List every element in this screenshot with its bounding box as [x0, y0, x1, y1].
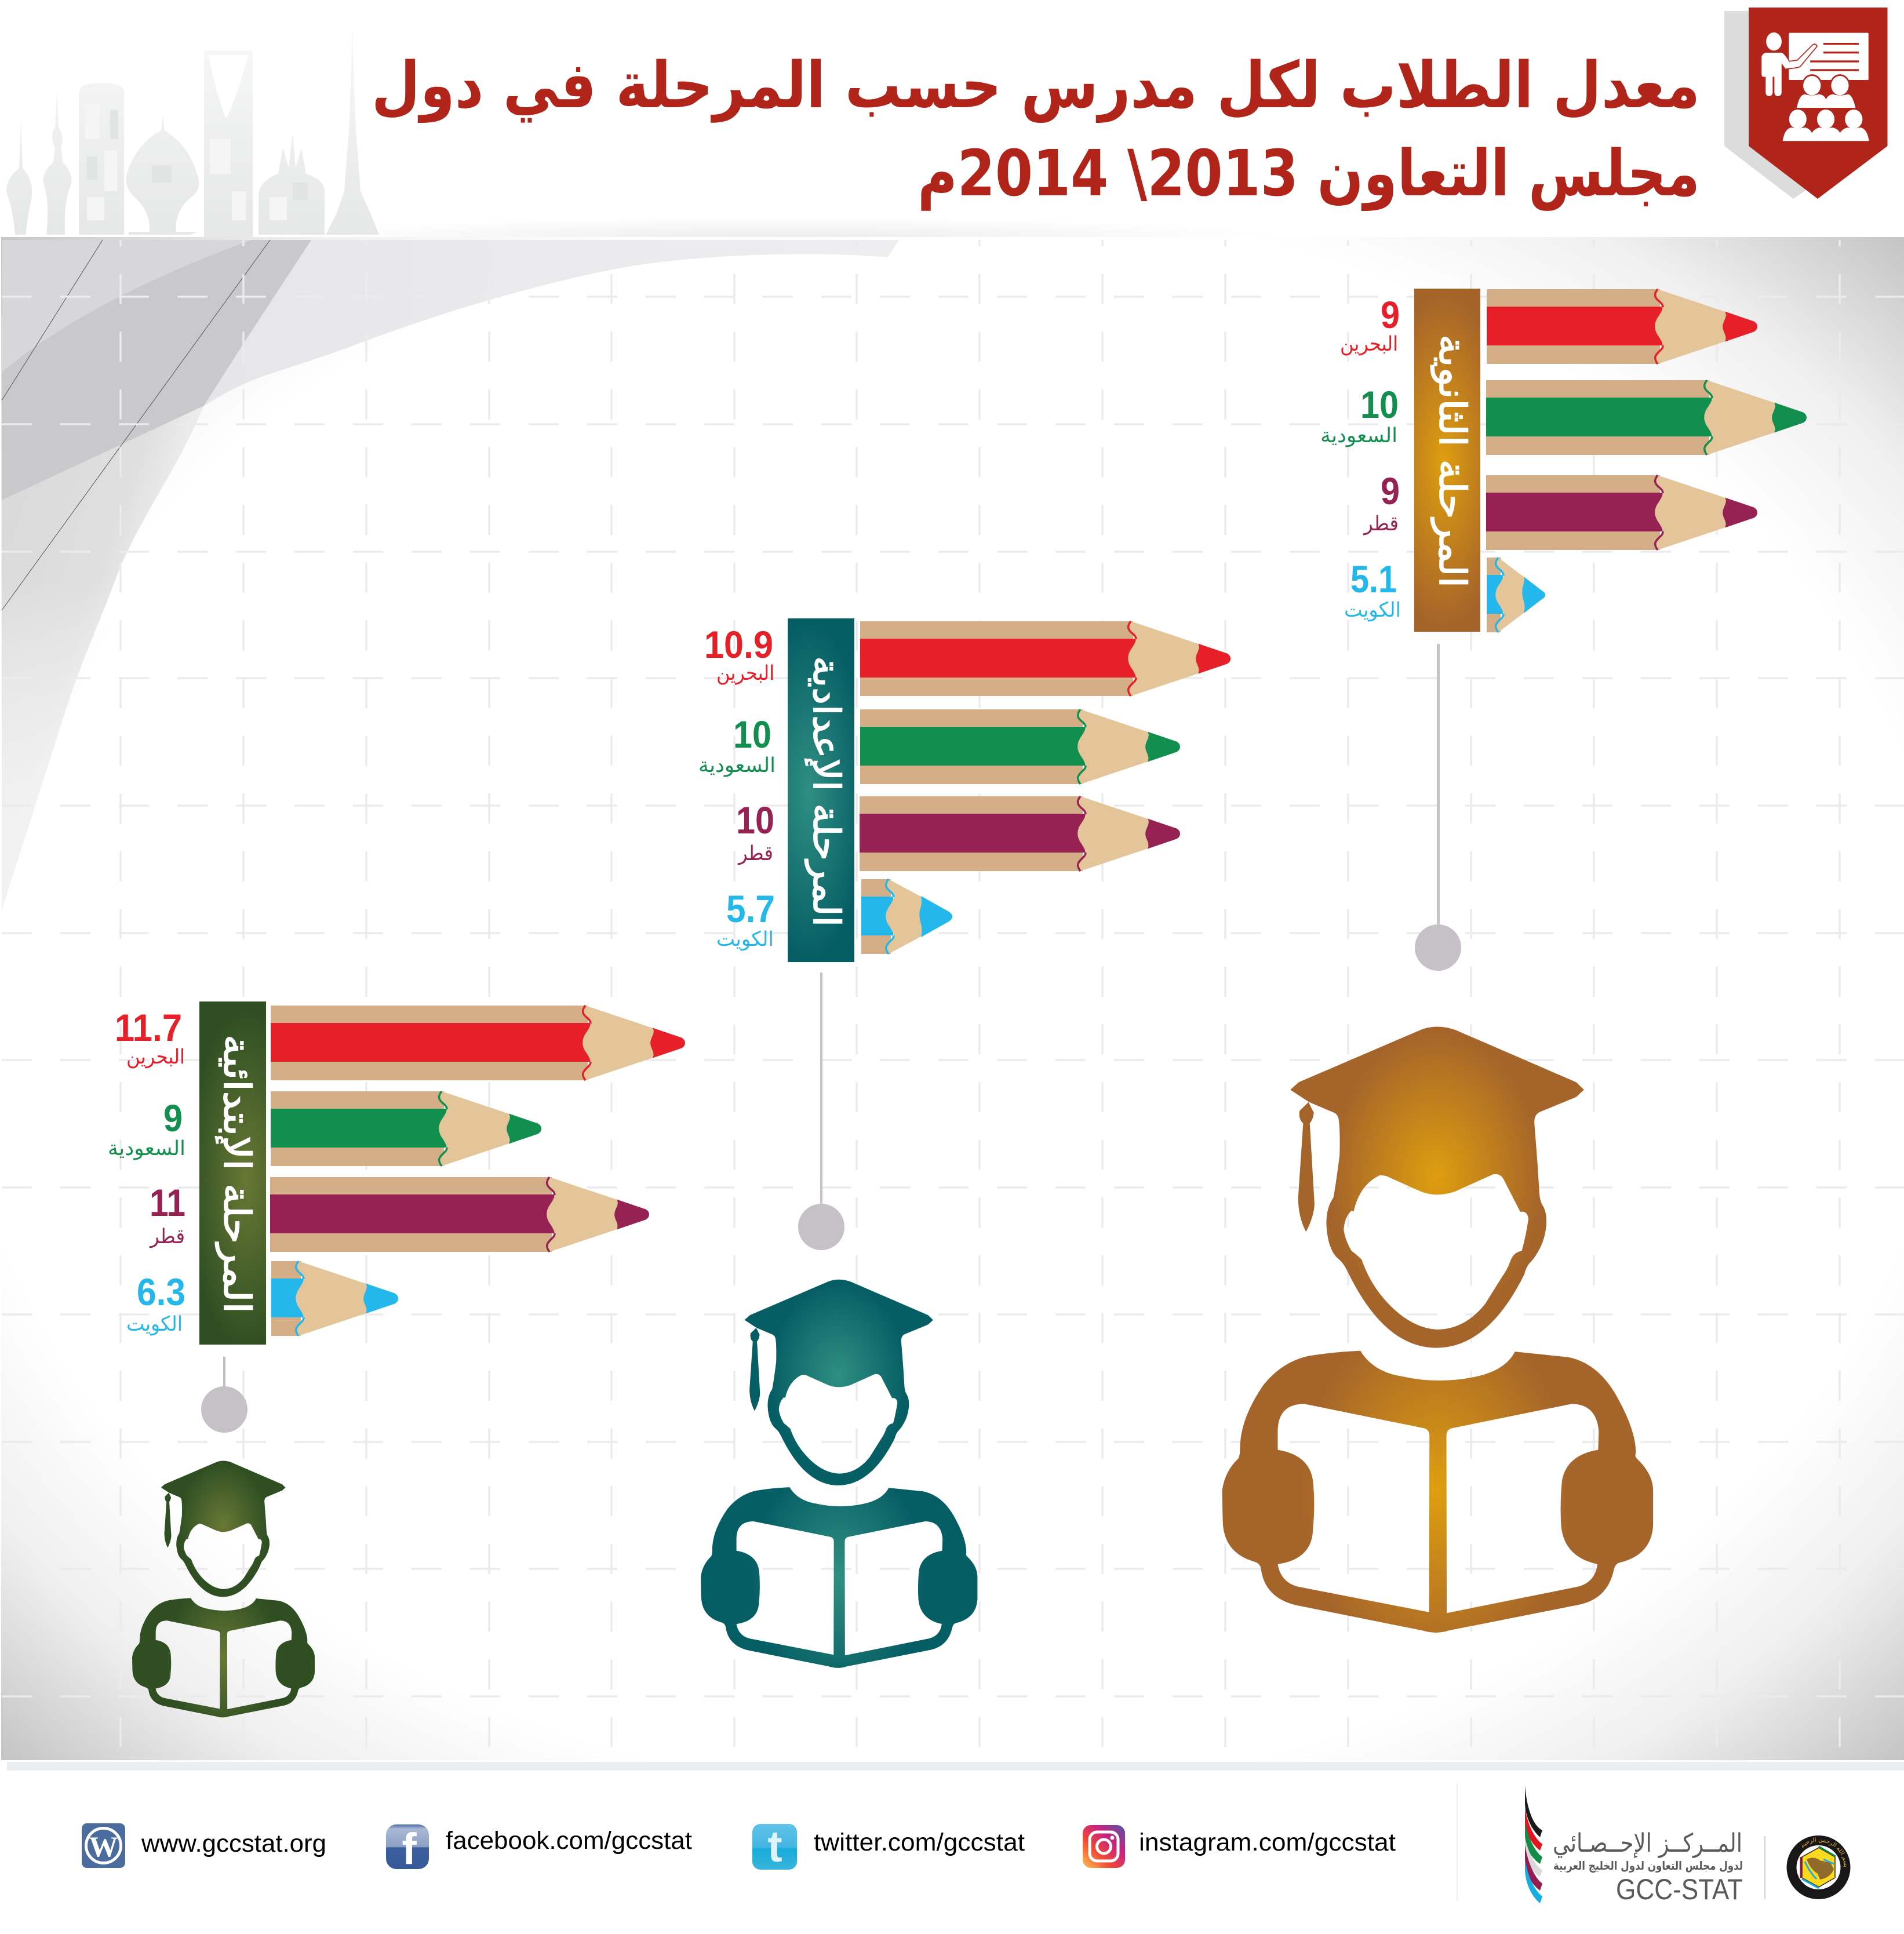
value labels: intermediate [698, 623, 776, 951]
value labels: secondary: 10 [1360, 383, 1399, 426]
logo: GCC emblem: بسم الله الرحمن الرحيم [1803, 1837, 1847, 1867]
value labels: intermediate: الكويت [716, 928, 774, 951]
value labels: intermediate: 10 [736, 799, 774, 842]
pencil: Kuwait 6.3 [271, 1261, 398, 1336]
logo: GCC-STAT: GCC-STAT [1616, 1873, 1743, 1906]
level banner: secondary [1414, 289, 1480, 632]
facebook link: f [402, 1824, 417, 1874]
value labels: secondary: قطر [1363, 512, 1399, 536]
connector: intermediate [798, 973, 844, 1250]
value labels: intermediate: قطر [737, 842, 773, 865]
icon: large student reading [1222, 1027, 1653, 1633]
logo divider [1764, 1836, 1765, 1899]
twitter link: t [767, 1822, 782, 1871]
icon: small student reading [132, 1460, 315, 1717]
facebook link [386, 1824, 692, 1874]
panel swoosh shapes [1, 216, 1904, 1762]
title [372, 48, 1700, 211]
background panel [1, 237, 1904, 1760]
pencil: Qatar 9 [1486, 475, 1757, 550]
logo ribbons [1525, 1785, 1542, 1903]
pencil: Kuwait 5.1 [1487, 558, 1545, 632]
pencil: Bahrain 11.7 [271, 1006, 685, 1080]
value labels: primary: البحرين [126, 1046, 185, 1069]
pencil: Qatar 11 [270, 1177, 649, 1252]
value labels: intermediate: 10.9 [704, 623, 773, 666]
logo: GCC-STAT [1525, 1785, 1743, 1906]
logo: GCC-STAT: المــركــز الإحــصـائي [1553, 1829, 1742, 1858]
twitter link [752, 1822, 1025, 1871]
value labels: primary: 9 [163, 1097, 183, 1139]
facebook link: facebook.com/gccstat [446, 1827, 692, 1855]
website link: www.gccstat.org [141, 1830, 326, 1857]
value labels: primary: الكويت [126, 1313, 183, 1336]
pencil: Qatar 10 [860, 796, 1180, 871]
pencil: Bahrain 10.9 [860, 621, 1230, 696]
website link [82, 1823, 326, 1868]
panel: secondary stage [1222, 289, 1807, 1633]
value labels: primary: قطر [149, 1225, 185, 1248]
value labels: secondary: الكويت [1344, 599, 1401, 622]
value labels: secondary: 9 [1381, 293, 1400, 336]
level banner: primary: المرحلة الإبتدائية [215, 1035, 258, 1313]
value labels: primary: السعودية [108, 1137, 185, 1160]
pencil: Kuwait 5.7 [861, 879, 952, 954]
instagram link: instagram.com/gccstat [1139, 1829, 1396, 1856]
level banner: intermediate: المرحلة الإعدادية [804, 656, 847, 927]
level banner: primary [199, 1001, 266, 1345]
footer separator [1457, 1783, 1458, 1901]
title: معدل الطلاب لكل مدرس حسب المرحلة في دول [372, 48, 1700, 123]
pencil: Saudi Arabia 10 [1486, 380, 1807, 455]
footer strip [7, 1762, 1904, 1771]
logo: GCC-STAT: لدول مجلس التعاون لدول الخليج العربية [1553, 1859, 1743, 1873]
icon: medium student reading [701, 1280, 977, 1668]
value labels: intermediate: البحرين [716, 662, 774, 685]
value labels: primary: 6.3 [137, 1270, 185, 1313]
title: مجلس التعاون 2013\ 2014م [918, 136, 1700, 211]
value labels: secondary: السعودية [1320, 424, 1397, 447]
website link: W [89, 1830, 118, 1863]
value labels: secondary: 9 [1381, 469, 1400, 512]
value labels: secondary [1320, 293, 1401, 622]
value labels: intermediate: 5.7 [726, 887, 775, 930]
value labels: primary: 11.7 [115, 1006, 182, 1049]
connector: secondary [1415, 644, 1461, 971]
pencil: Bahrain 9 [1487, 289, 1757, 364]
level banner: intermediate [788, 618, 854, 962]
instagram link [1083, 1825, 1396, 1868]
pencil: Saudi Arabia 9 [271, 1091, 541, 1166]
panel: primary stage [108, 1001, 685, 1717]
value labels: intermediate: 10 [733, 713, 771, 756]
level banner: secondary: المرحلة الثانوية [1430, 334, 1473, 588]
panel: intermediate stage [698, 618, 1230, 1668]
value labels: secondary: البحرين [1340, 333, 1398, 356]
pencil: Saudi Arabia 10 [860, 709, 1180, 784]
value labels: secondary: 5.1 [1350, 558, 1397, 600]
skyline illustration [6, 25, 379, 237]
value labels: primary: 11 [150, 1181, 185, 1224]
twitter link: twitter.com/gccstat [814, 1829, 1025, 1856]
icon: teacher and students badge [1724, 8, 1887, 199]
value labels: primary [108, 1006, 185, 1336]
header background glow [290, 197, 1275, 238]
connector: primary [201, 1357, 247, 1433]
value labels: intermediate: السعودية [698, 754, 776, 777]
